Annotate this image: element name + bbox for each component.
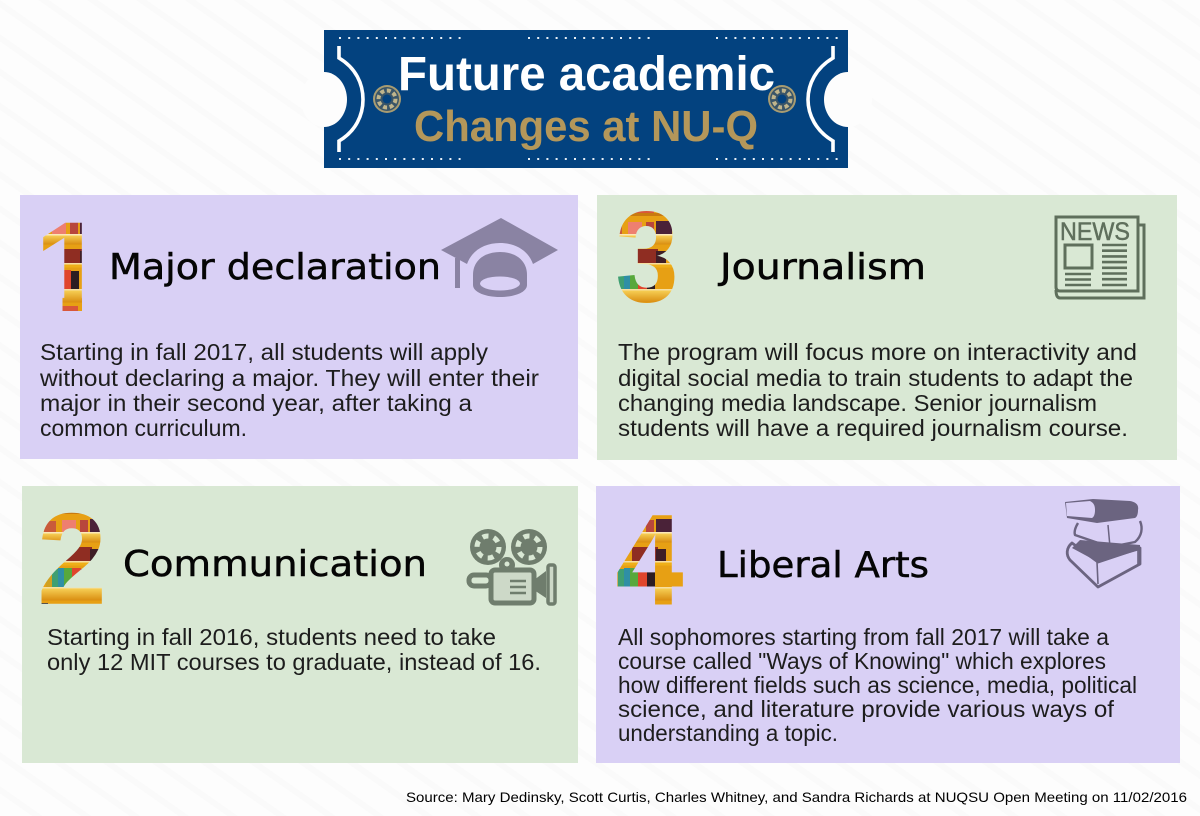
source note: Source: Mary Dedinsky, Scott Curtis, Charles Whitney, and Sandra Richards at NUQSU Open Meeting on 11/02/2016 xyxy=(406,789,1187,805)
icon: newspaper: NEWS xyxy=(1060,218,1130,246)
body text: common curriculum. xyxy=(40,415,247,441)
body text: students will have a required journalism course. xyxy=(618,415,1128,441)
heading: Major declaration xyxy=(109,247,441,288)
panel: communication xyxy=(22,486,578,763)
icon: film camera xyxy=(469,529,555,604)
body text xyxy=(47,624,541,675)
number 2: 2 xyxy=(38,488,106,631)
heading: Liberal Arts xyxy=(717,545,929,586)
body text: The program will focus more on interactivity and xyxy=(618,339,1137,365)
icon: stack of books xyxy=(1065,499,1142,587)
body text: All sophomores starting from fall 2017 will take a xyxy=(618,624,1109,650)
title banner xyxy=(301,30,872,168)
body text: science, and literature provide various ways of xyxy=(618,696,1115,722)
title line 1: Future academic xyxy=(398,48,775,101)
body text: understanding a topic. xyxy=(618,720,838,746)
icon: graduation cap xyxy=(441,218,558,297)
panel: journalism xyxy=(597,186,1177,460)
body text: only 12 MIT courses to graduate, instead of 16. xyxy=(47,649,541,675)
icon: left medallion xyxy=(373,85,401,113)
number 3: 3 xyxy=(616,186,678,329)
body text: course called "Ways of Knowing" which explores xyxy=(618,648,1106,674)
body text xyxy=(618,624,1137,746)
heading: Journalism xyxy=(718,247,926,288)
icon: newspaper xyxy=(1056,217,1144,298)
body text: Starting in fall 2016, students need to take xyxy=(47,624,496,650)
number 4: 4 xyxy=(616,489,683,632)
body text: how different fields such as science, media, political xyxy=(618,672,1137,698)
body text: Starting in fall 2017, all students will apply xyxy=(40,339,489,365)
icon: right medallion xyxy=(768,85,796,113)
title line 2: Changes at NU-Q xyxy=(414,102,758,151)
number 1: 1 xyxy=(34,196,106,339)
body text xyxy=(39,339,539,441)
panel: liberal arts xyxy=(596,486,1180,763)
body text: changing media landscape. Senior journalism xyxy=(618,390,1097,416)
body text: digital social media to train students to adapt the xyxy=(618,365,1133,391)
body text xyxy=(618,339,1137,441)
body text: without declaring a major. They will enter their xyxy=(39,365,539,391)
body text: major in their second year, after taking a xyxy=(40,390,472,416)
panel: major declaration xyxy=(20,195,578,459)
heading: Communication xyxy=(123,544,427,585)
